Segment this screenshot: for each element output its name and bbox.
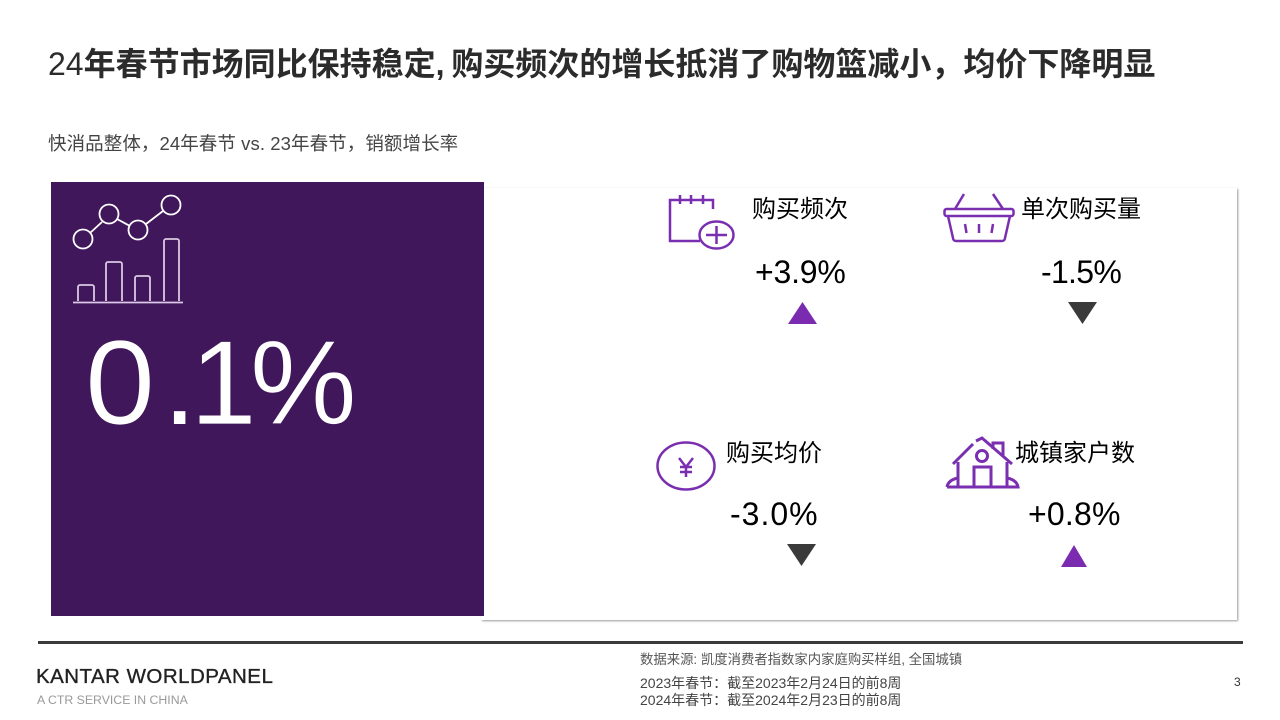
label: 城镇家户数 bbox=[1015, 440, 1135, 467]
arrow down bbox=[1068, 302, 1097, 324]
value: -3.0% bbox=[730, 496, 819, 532]
metric: purchase frequency bbox=[668, 195, 848, 324]
big number: 0 bbox=[85, 317, 155, 450]
icon: line and bar chart bbox=[72, 194, 183, 304]
big number: . bbox=[163, 316, 196, 450]
value: -1.5% bbox=[1041, 254, 1121, 290]
logo tagline: A CTR SERVICE IN CHINA bbox=[37, 693, 188, 707]
value: +3.9% bbox=[755, 254, 846, 290]
arrow up bbox=[788, 302, 817, 324]
icon: yuan bbox=[656, 441, 716, 491]
label: 单次购买量 bbox=[1021, 196, 1141, 223]
source note: 数据来源: 凯度消费者指数家内家庭购买样组, 全国城镇 bbox=[640, 652, 962, 667]
label: 购买频次 bbox=[752, 196, 848, 223]
metric: average price bbox=[656, 440, 822, 566]
logo name: KANTAR WORLDPANEL bbox=[36, 665, 273, 688]
title: 24年春节市场同比保持稳定, 购买频次的增长抵消了购物篮减小，均价下降明显 bbox=[48, 46, 1155, 82]
icon: house bbox=[946, 436, 1020, 488]
footer rule bbox=[38, 641, 1243, 644]
period notes: 2024年春节：截至2024年2月23日的前8周 bbox=[640, 692, 901, 708]
icon: calendar plus bbox=[668, 195, 735, 250]
value: +0.8% bbox=[1028, 496, 1121, 532]
big number: 1 bbox=[190, 316, 257, 450]
big number bbox=[85, 316, 357, 450]
big number: % bbox=[250, 316, 357, 450]
logo bbox=[36, 665, 273, 707]
arrow up bbox=[1061, 545, 1087, 567]
panel: total growth bbox=[51, 182, 484, 616]
period notes bbox=[640, 675, 901, 708]
page number: 3 bbox=[1234, 675, 1241, 689]
panel: metrics card bbox=[481, 188, 1237, 620]
arrow down bbox=[787, 544, 816, 566]
subtitle: 快消品整体，24年春节 vs. 23年春节，销额增长率 bbox=[48, 133, 458, 154]
label: 购买均价 bbox=[726, 440, 822, 467]
period notes: 2023年春节：截至2023年2月24日的前8周 bbox=[640, 675, 901, 691]
icon: basket bbox=[943, 193, 1015, 242]
metric: units per trip bbox=[943, 193, 1141, 324]
metric: urban households bbox=[946, 436, 1135, 567]
